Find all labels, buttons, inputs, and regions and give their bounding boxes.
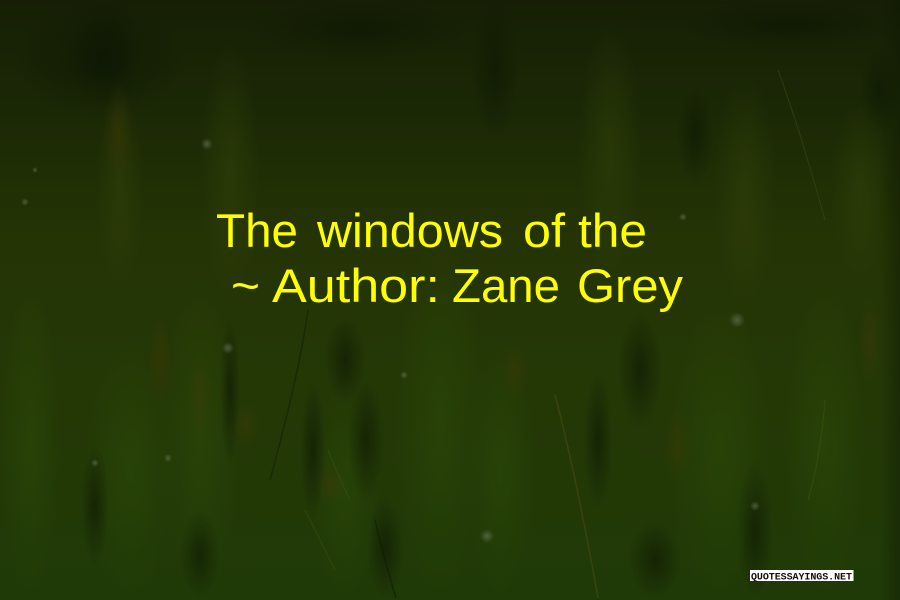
quote line 2: author: Grey <box>577 259 684 312</box>
quote line 1: The <box>216 204 298 257</box>
quote text <box>216 204 684 312</box>
quote line 2: author <box>231 259 684 312</box>
quote line 1: of <box>523 204 566 257</box>
quote line 1 <box>216 204 647 257</box>
quote line 1: the <box>578 204 647 257</box>
watermark: quotessayings.net: QUOTESSAYINGS.NET <box>751 572 852 584</box>
quote line 2: author: Zane <box>452 259 560 312</box>
quote line 2: author: ~ <box>231 259 260 312</box>
quote line 2: author: Author: <box>272 259 440 312</box>
quote line 1: windows <box>316 204 503 257</box>
